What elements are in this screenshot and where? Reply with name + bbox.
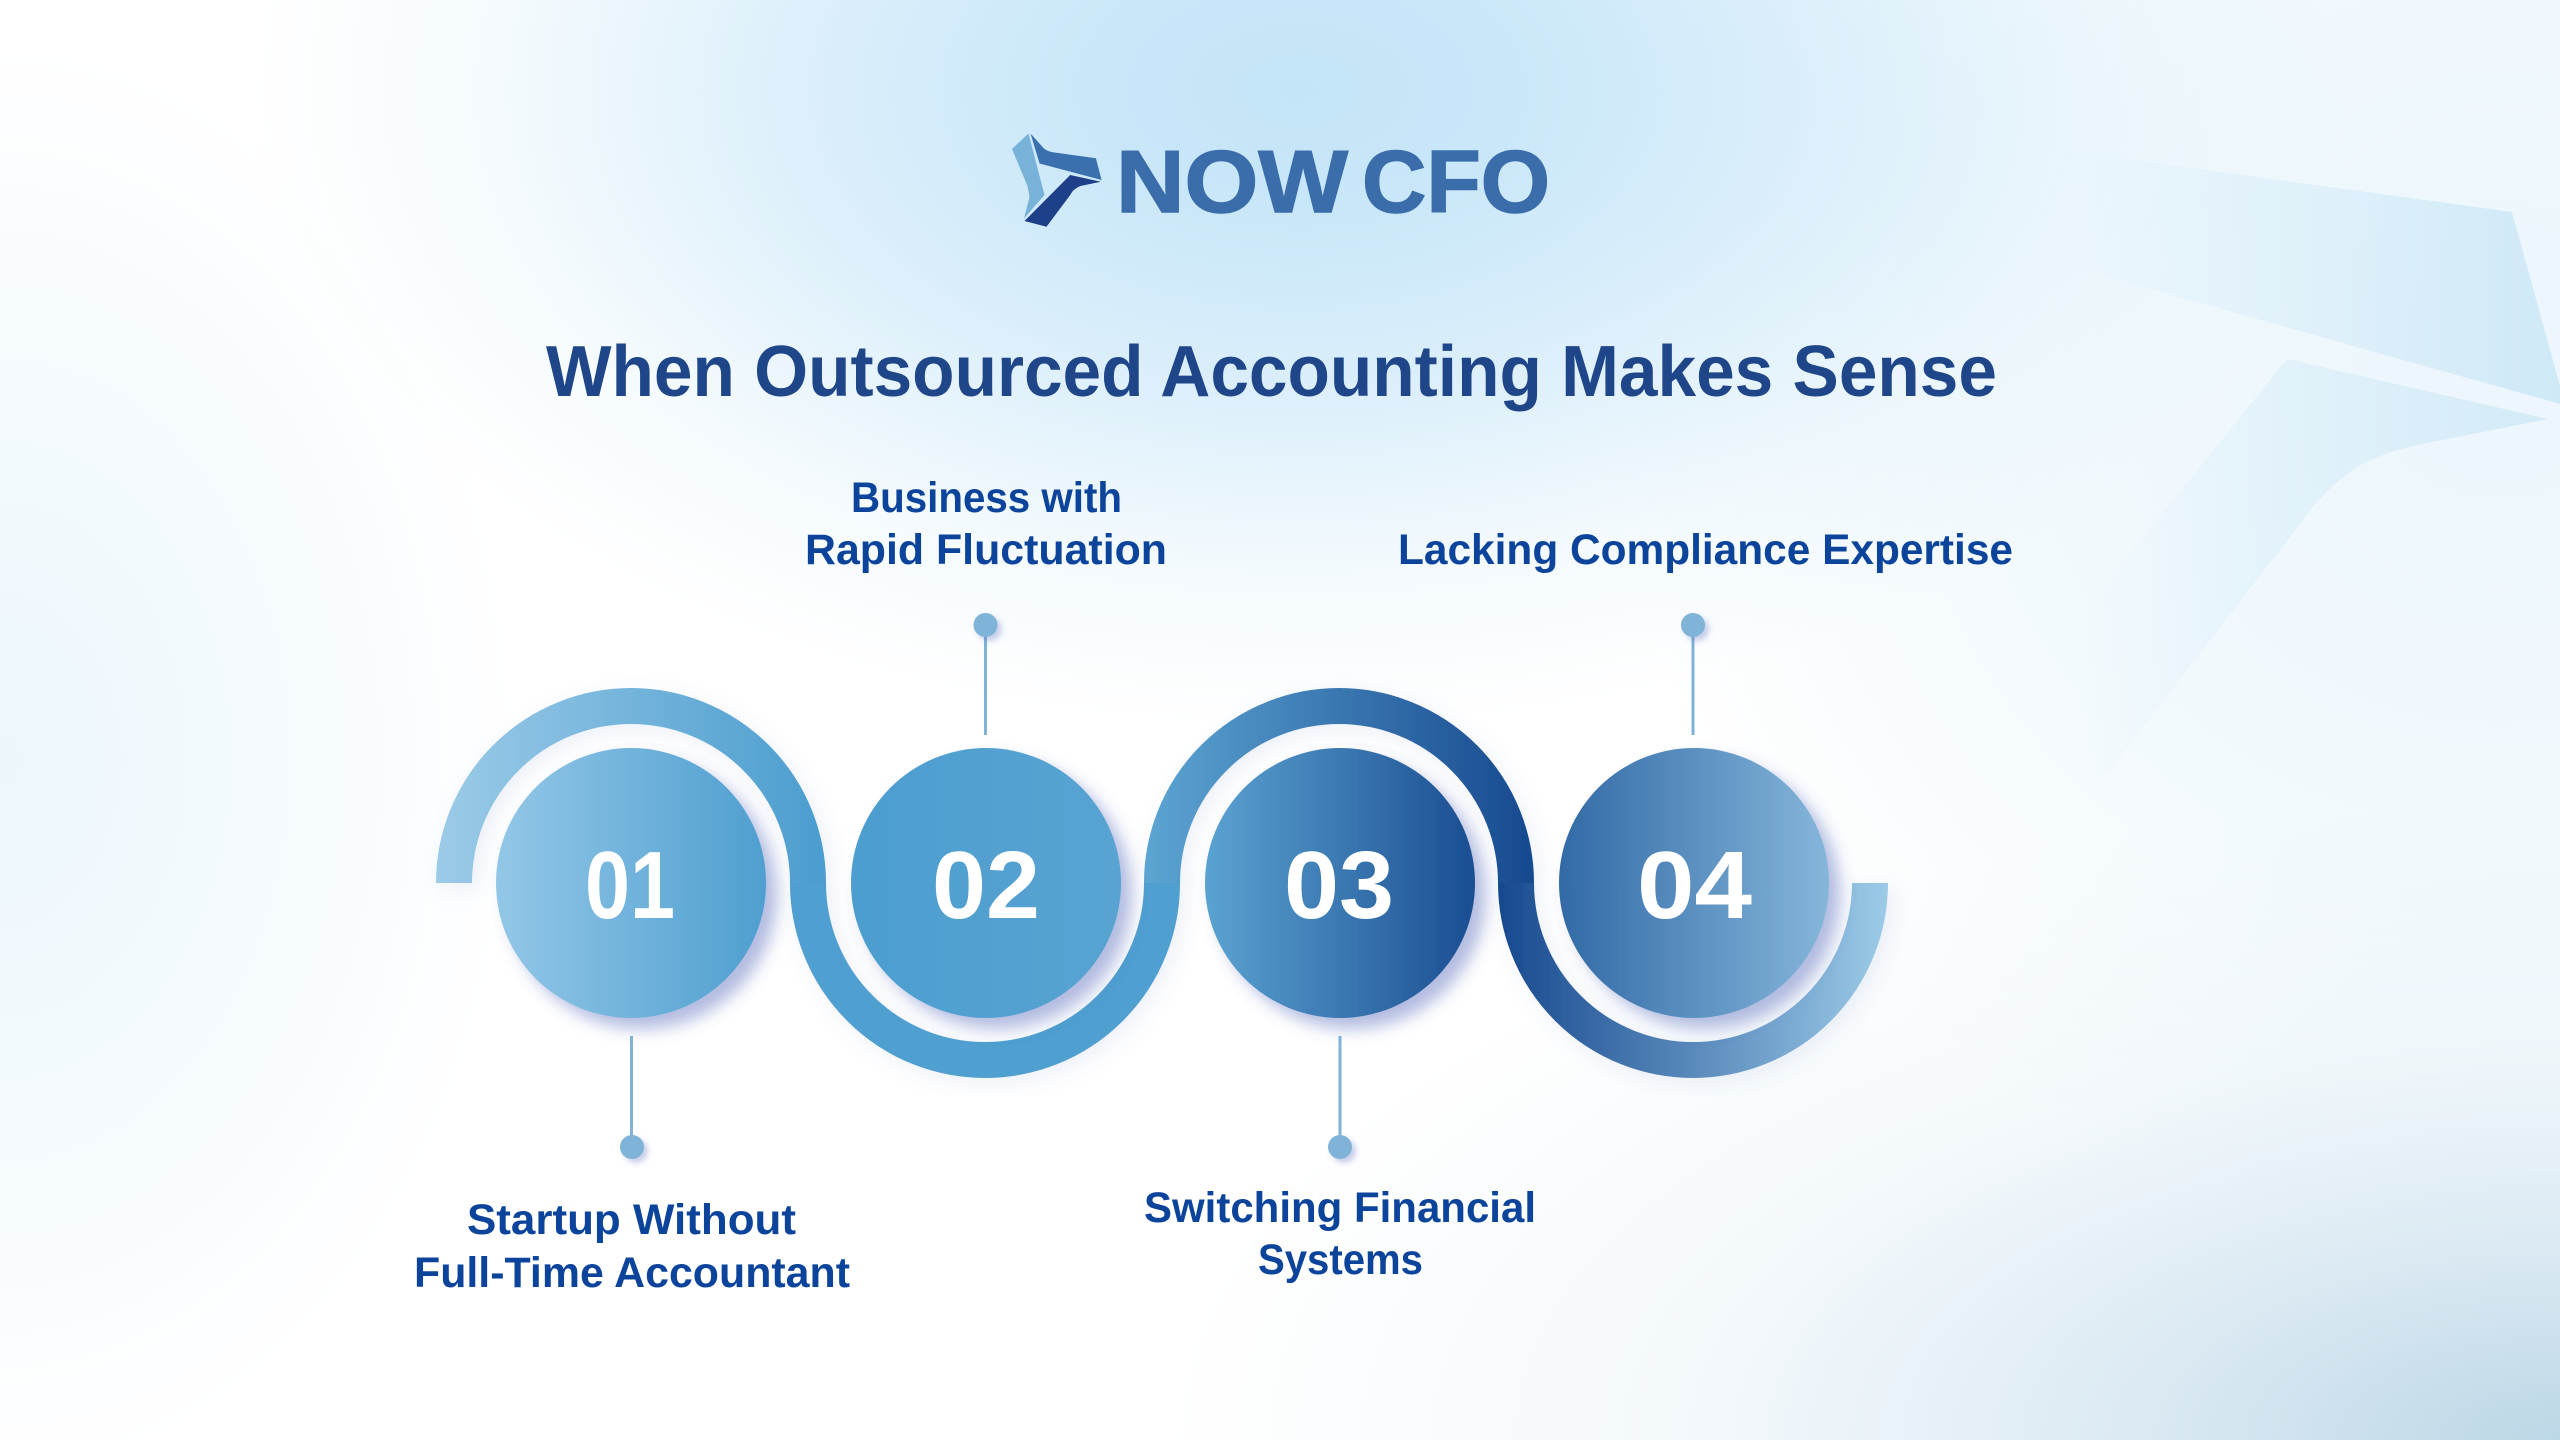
logo wordmark: CFO [1362, 132, 1550, 231]
step 02 circle [851, 748, 1121, 1018]
title: When Outsourced Accounting Makes Sense [546, 332, 1997, 412]
step 02 connector [974, 613, 998, 735]
step 01 label: Full-Time Accountant [414, 1249, 850, 1297]
watermark: logo shape, upper blade [2040, 145, 2560, 404]
step 04 label: Lacking Compliance Expertise [1398, 526, 2013, 574]
logo [1012, 132, 1550, 231]
step 03 [1144, 748, 1536, 1284]
step 04 number: 04 [1637, 832, 1752, 939]
step 01 number: 01 [585, 832, 675, 939]
step 03 connector [1328, 1036, 1352, 1159]
step 04 [1398, 526, 2013, 1018]
step 01 label: Startup Without [467, 1196, 796, 1244]
step 01 label [414, 1196, 850, 1297]
logo wordmark: NOW [1116, 132, 1348, 231]
step 03 label: Systems [1258, 1236, 1423, 1284]
step 02 label: Rapid Fluctuation [805, 526, 1167, 574]
step 01 connector [620, 1036, 644, 1159]
logo wordmark [1116, 132, 1550, 231]
serpentine ribbon [454, 706, 1870, 1060]
step 01 [414, 748, 850, 1297]
step 03 number: 03 [1284, 832, 1394, 939]
step 03 circle [1205, 748, 1475, 1018]
step 01 circle [496, 748, 766, 1018]
step 04 connector [1681, 613, 1705, 735]
logo icon [1012, 134, 1102, 227]
step 02 label [805, 474, 1167, 574]
step 03 label: Switching Financial [1144, 1184, 1536, 1232]
watermark: logo shape, lower blade [2060, 359, 2548, 810]
step 04 circle [1559, 748, 1829, 1018]
step 02 [805, 474, 1167, 1018]
step 02 label: Business with [851, 474, 1122, 522]
step 02 number: 02 [932, 832, 1040, 939]
step 03 label [1144, 1184, 1536, 1284]
